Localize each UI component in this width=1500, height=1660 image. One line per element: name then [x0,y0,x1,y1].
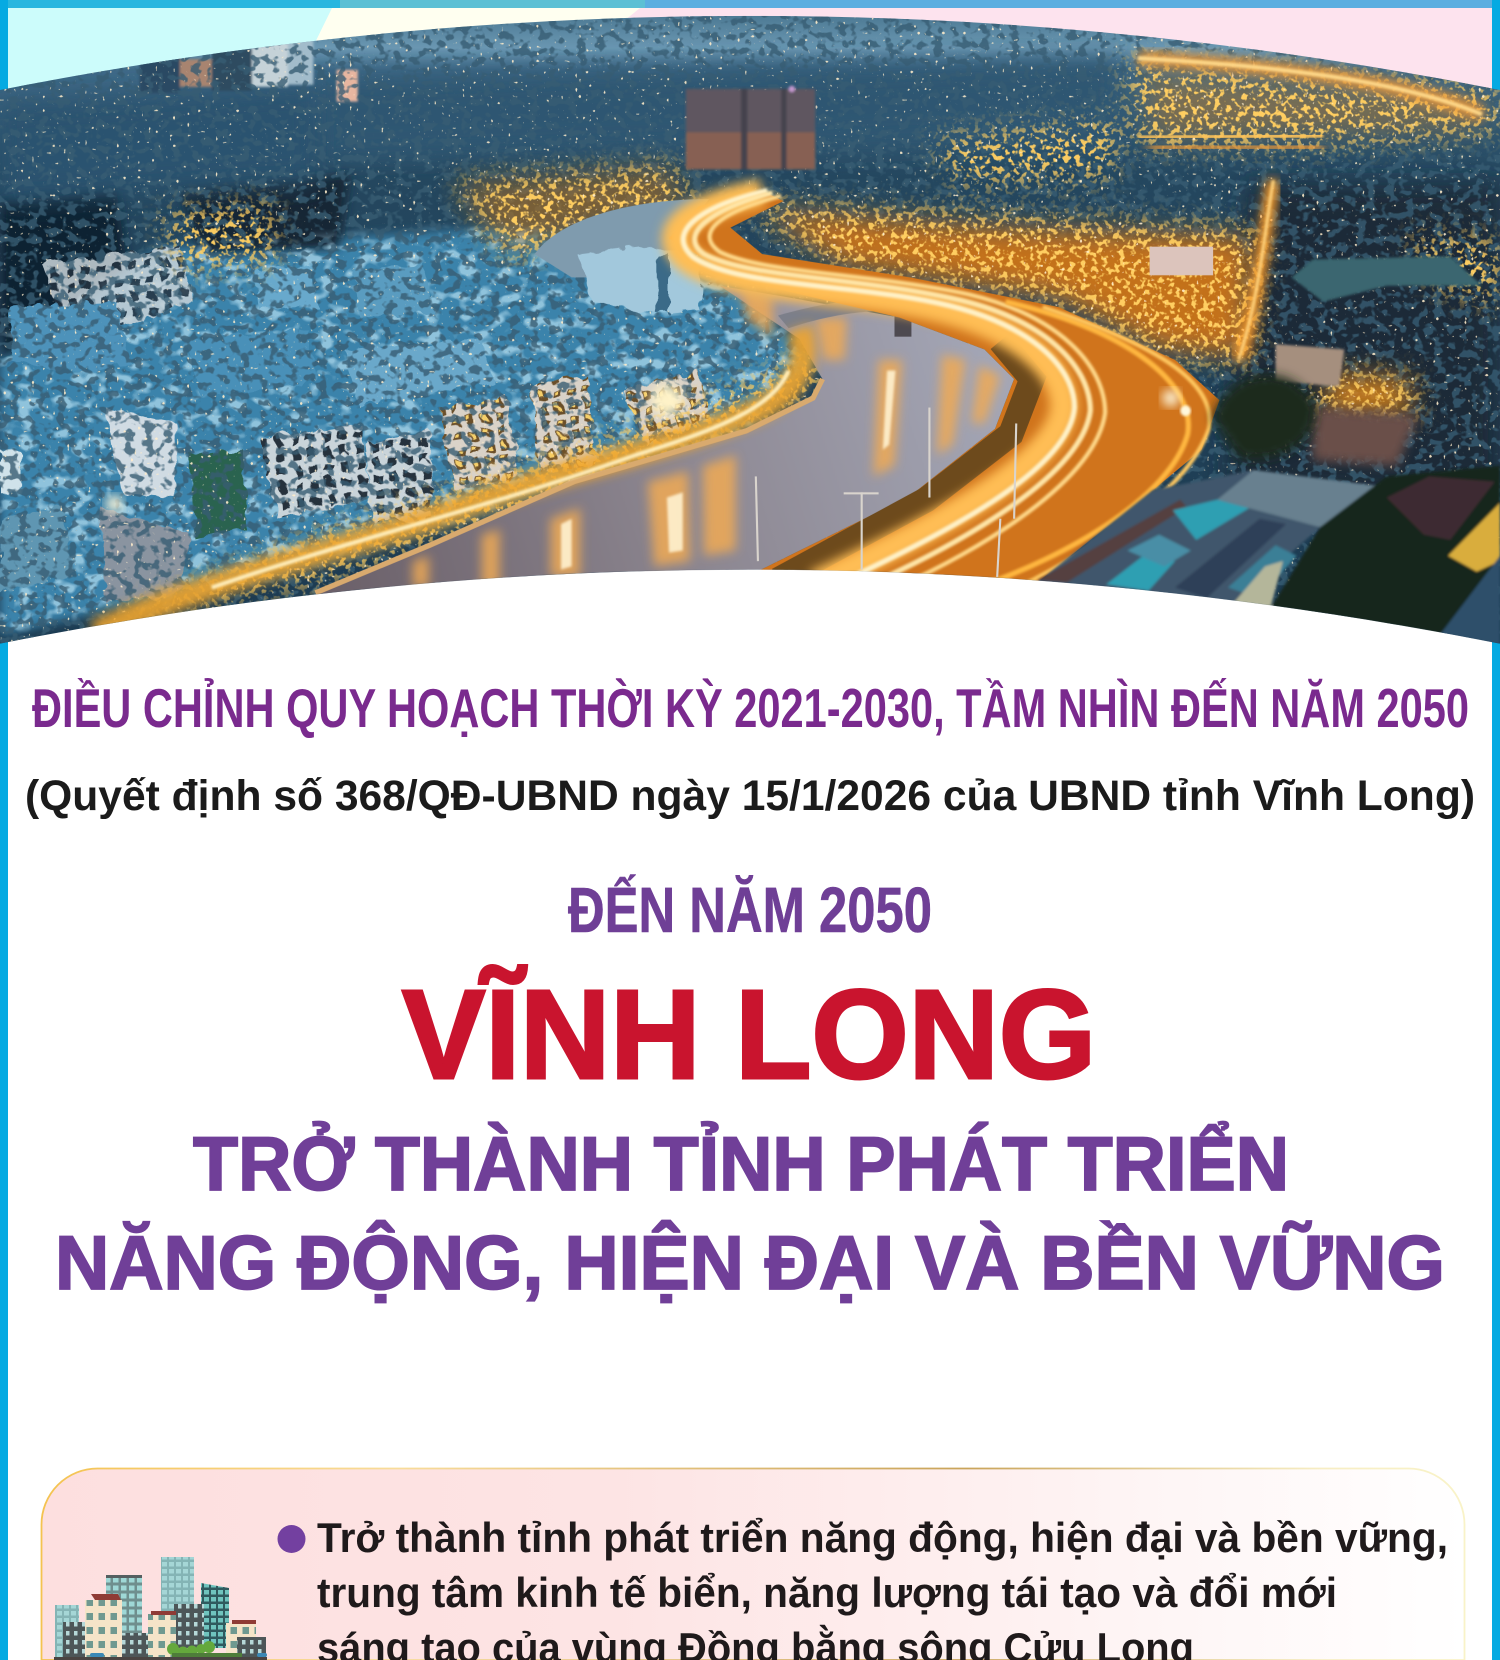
bullet dot [278,1525,306,1553]
buildings in front of the upper river [577,246,699,313]
river [315,199,1014,595]
road and highway light trails [669,58,1482,589]
bridge over the river [778,302,912,337]
main title: Vĩnh Long: VĨNH LONG [402,964,1096,1105]
river bank lights [95,328,1191,633]
rooftops at bottom right [1037,466,1500,646]
central tower block [686,86,815,169]
goal text: Trở thành tỉnh phát triển năng động, hiện đại và bền vững, [317,1514,1448,1561]
goal text [317,1514,1448,1660]
warm glow across the city [455,74,1482,413]
decision reference line: (Quyết định số 368/QĐ-UBND ngày 15/1/2026 của UBND tỉnh Vĩnh Long) [25,772,1475,820]
hero photo: city and river at night [0,0,1500,656]
panel: development goal [42,1468,1464,1660]
title line: becoming a developed province: TRỞ THÀNH TỈNH PHÁT TRIỂN [193,1121,1289,1207]
left skyline towers [140,38,358,102]
goal text: trung tâm kinh tế biển, năng lượng tái tạo và đổi mới [317,1569,1337,1616]
pale buildings on the left bank [0,246,709,603]
right side buildings and billboard [1150,247,1482,466]
warm city lights [104,41,1500,616]
icon: city skyline [54,1557,267,1660]
sky and base city tone [0,0,1500,656]
street lamps [756,408,1016,577]
title line: dynamic, modern, sustainable: NĂNG ĐỘNG, HIỆN ĐẠI VÀ BỀN VỮNG [55,1220,1445,1306]
subheading: by 2050: ĐẾN NĂM 2050 [568,874,932,946]
city block texture [0,225,796,632]
dark gaps between buildings [0,64,1500,656]
scattered lights [0,64,1500,593]
